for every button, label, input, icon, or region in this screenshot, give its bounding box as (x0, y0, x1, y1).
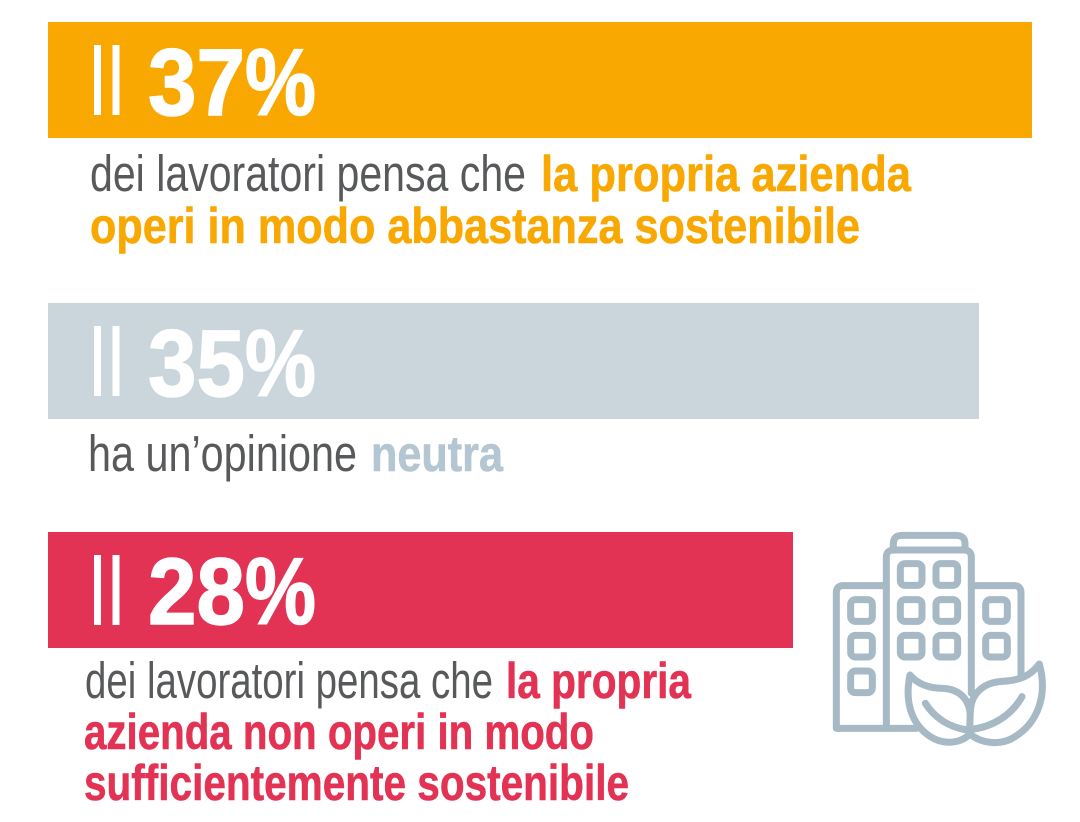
bar: red 28%: % (245, 539, 316, 645)
bar: grey 35%: 35 (148, 311, 245, 417)
bar: orange 37%: 37 (148, 30, 245, 136)
bar: grey 35% (48, 303, 979, 419)
bar: grey 35%: % (245, 311, 316, 417)
icon: buildings with leaves (836, 535, 1042, 743)
text: 37% description: la propria azienda (541, 146, 912, 202)
text: 28% description: azienda non operi in modo (84, 704, 594, 760)
bar: orange 37%: % (245, 30, 316, 136)
text: 37% description: operi in modo abbastanza sostenibile (90, 198, 860, 254)
text: 37% description (90, 145, 912, 254)
panel: 35% statistic (48, 303, 979, 482)
text: 28% description: dei lavoratori pensa che (85, 652, 493, 709)
text: 37% description: dei lavoratori pensa che (90, 145, 526, 202)
text: 28% description: la propria (506, 653, 692, 709)
bar: red 28% (48, 532, 793, 648)
text: 35% description: ha un’opinione (88, 425, 357, 482)
bar: red 28%: 28 (148, 539, 245, 645)
text: 28% description (84, 652, 692, 811)
panel: 28% statistic (48, 532, 793, 811)
bar: orange 37% (48, 22, 1032, 138)
text: 35% description: neutra (371, 426, 504, 482)
text: 28% description: sufficientemente sostenibile (84, 755, 629, 811)
panel: 37% statistic (48, 22, 1032, 254)
